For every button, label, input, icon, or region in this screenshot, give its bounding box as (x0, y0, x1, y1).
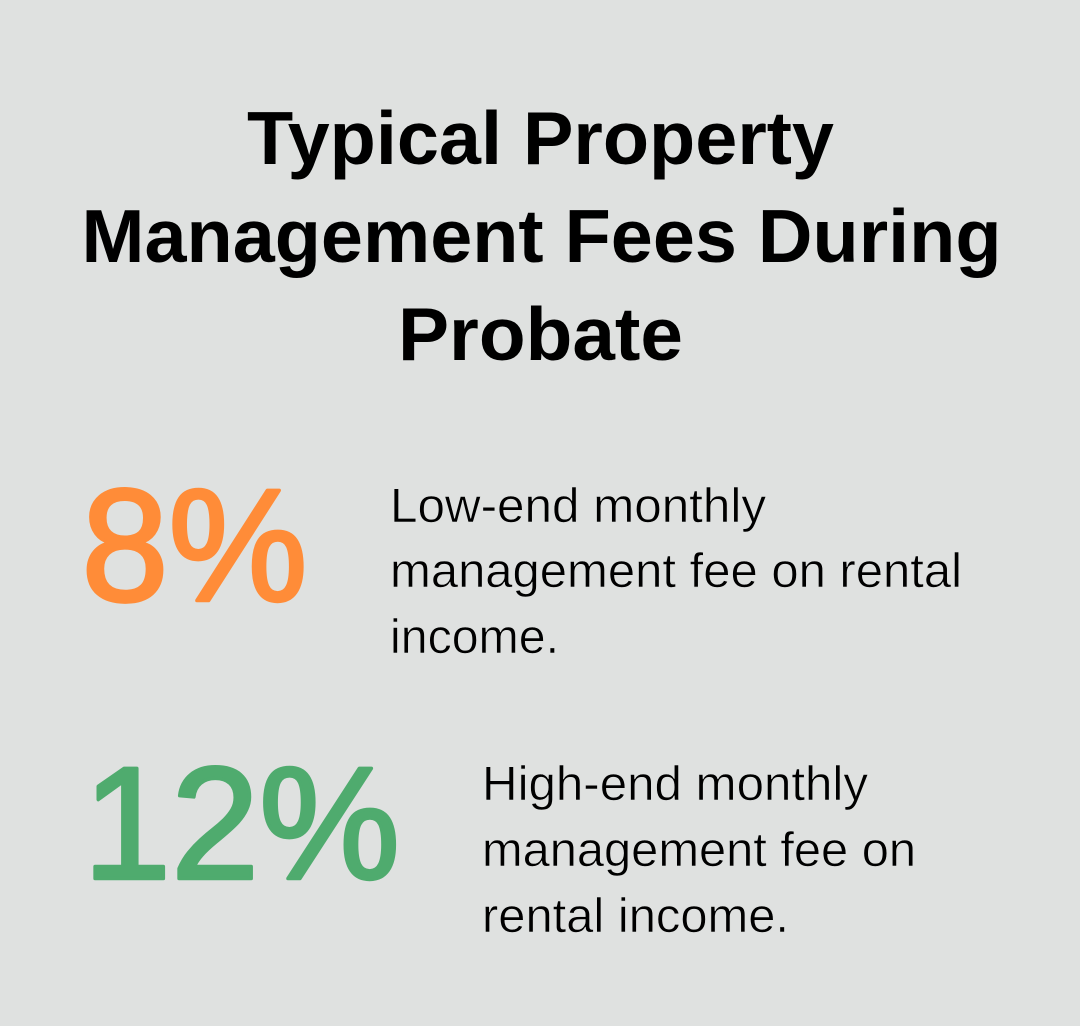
title: Probate (398, 292, 683, 376)
description: low-end fee: Low-end monthly (390, 480, 766, 533)
title: Typical Property (247, 96, 834, 180)
description: high-end fee: High-end monthly (482, 758, 868, 811)
description: high-end fee (482, 758, 916, 943)
stat: 8 percent low-end fee (82, 456, 962, 664)
description: high-end fee: rental income. (482, 890, 789, 943)
description: low-end fee (390, 480, 962, 664)
description: low-end fee: management fee on rental (390, 545, 962, 598)
number: 12%: 12% (83, 734, 400, 912)
number: 8%: 8% (82, 456, 308, 634)
description: low-end fee: income. (390, 611, 559, 664)
description: high-end fee: management fee on (482, 824, 916, 877)
title (82, 96, 1002, 376)
title: Management Fees During (82, 194, 1002, 278)
stat: 12 percent high-end fee (83, 734, 916, 943)
